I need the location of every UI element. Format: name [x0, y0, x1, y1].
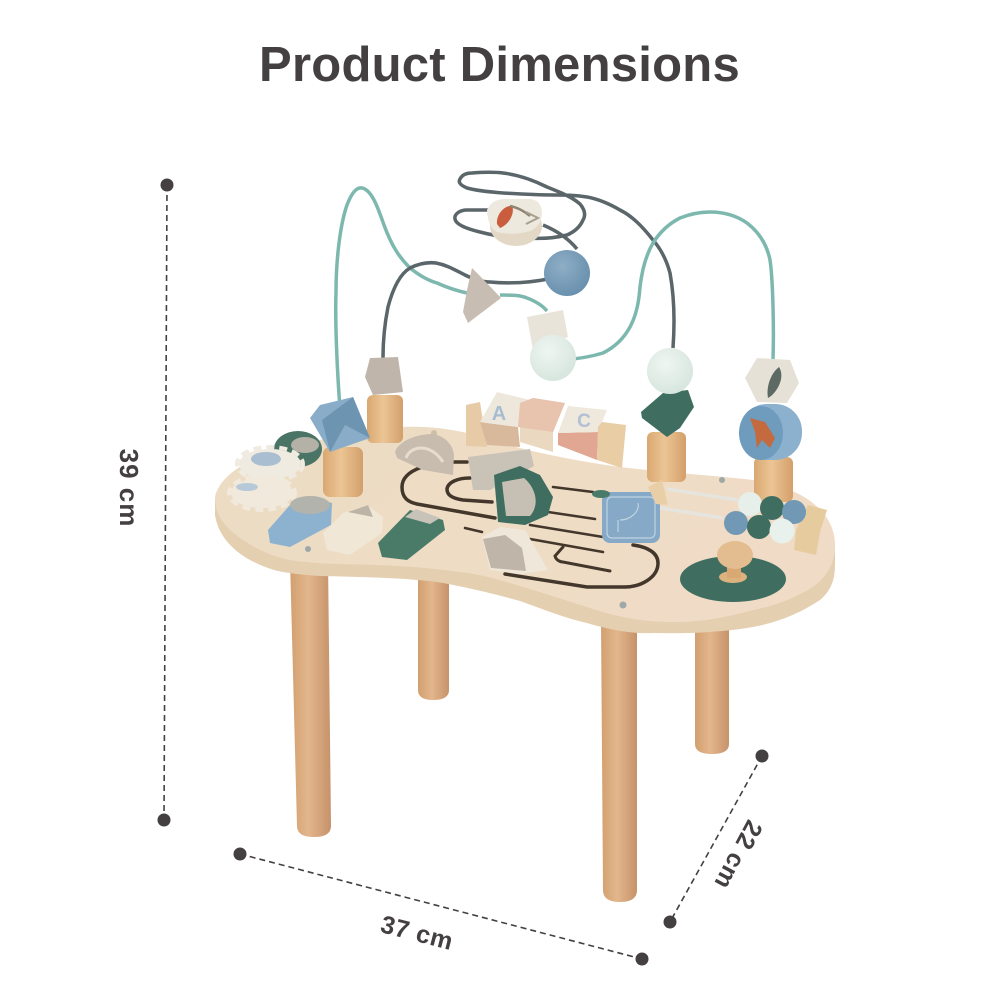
- table legs: [290, 560, 729, 902]
- centre right peg with white ball and green bead: [641, 348, 694, 482]
- small green oval: [592, 490, 610, 498]
- rainbow arch: [395, 434, 454, 475]
- height dimension: 39 cm: 39 cm: [114, 449, 144, 527]
- activity table illustration: [215, 172, 835, 902]
- wire: dark grey coil: [455, 172, 674, 348]
- blue cloud piece: [268, 496, 332, 547]
- alphabet blocks: A: [492, 403, 506, 425]
- title: Product Dimensions: [259, 38, 740, 92]
- width dimension: 37 cm: 37 cm: [378, 910, 456, 956]
- white ball: [530, 335, 576, 381]
- raccoon block: [482, 527, 548, 574]
- short peg: [323, 447, 363, 497]
- cream block bead: [527, 310, 568, 350]
- cream house piece: [323, 505, 383, 555]
- wire: dark grey lower: [383, 263, 553, 358]
- green rectangle block: [378, 509, 445, 560]
- grey animal block: [468, 449, 534, 490]
- blue elephant block: [602, 492, 660, 543]
- bird bead: [487, 199, 542, 246]
- depth dimension: 22 cm: 22 cm: [708, 816, 768, 894]
- height dimension: 39 cm: [114, 178, 174, 826]
- elephant block green: [494, 466, 553, 525]
- maze track: [402, 462, 658, 587]
- abacus: [648, 480, 827, 555]
- depth dimension: 22 cm: [664, 750, 768, 928]
- wire: teal right: [562, 212, 773, 360]
- blue geometric bead: [310, 397, 370, 452]
- white gears: [229, 447, 303, 510]
- wire: teal left: [336, 188, 547, 408]
- green gear: [274, 431, 322, 467]
- right peg with leaf and deer beads: [739, 358, 802, 502]
- green disc with wooden knob: [680, 541, 786, 602]
- left grey bead on peg: [365, 357, 403, 443]
- alphabet blocks: [466, 392, 626, 468]
- blue ball: [544, 250, 590, 296]
- triangle bead: [463, 268, 501, 323]
- table top: [215, 427, 835, 633]
- alphabet blocks: C: [577, 411, 591, 432]
- width dimension: 37 cm: [234, 848, 648, 966]
